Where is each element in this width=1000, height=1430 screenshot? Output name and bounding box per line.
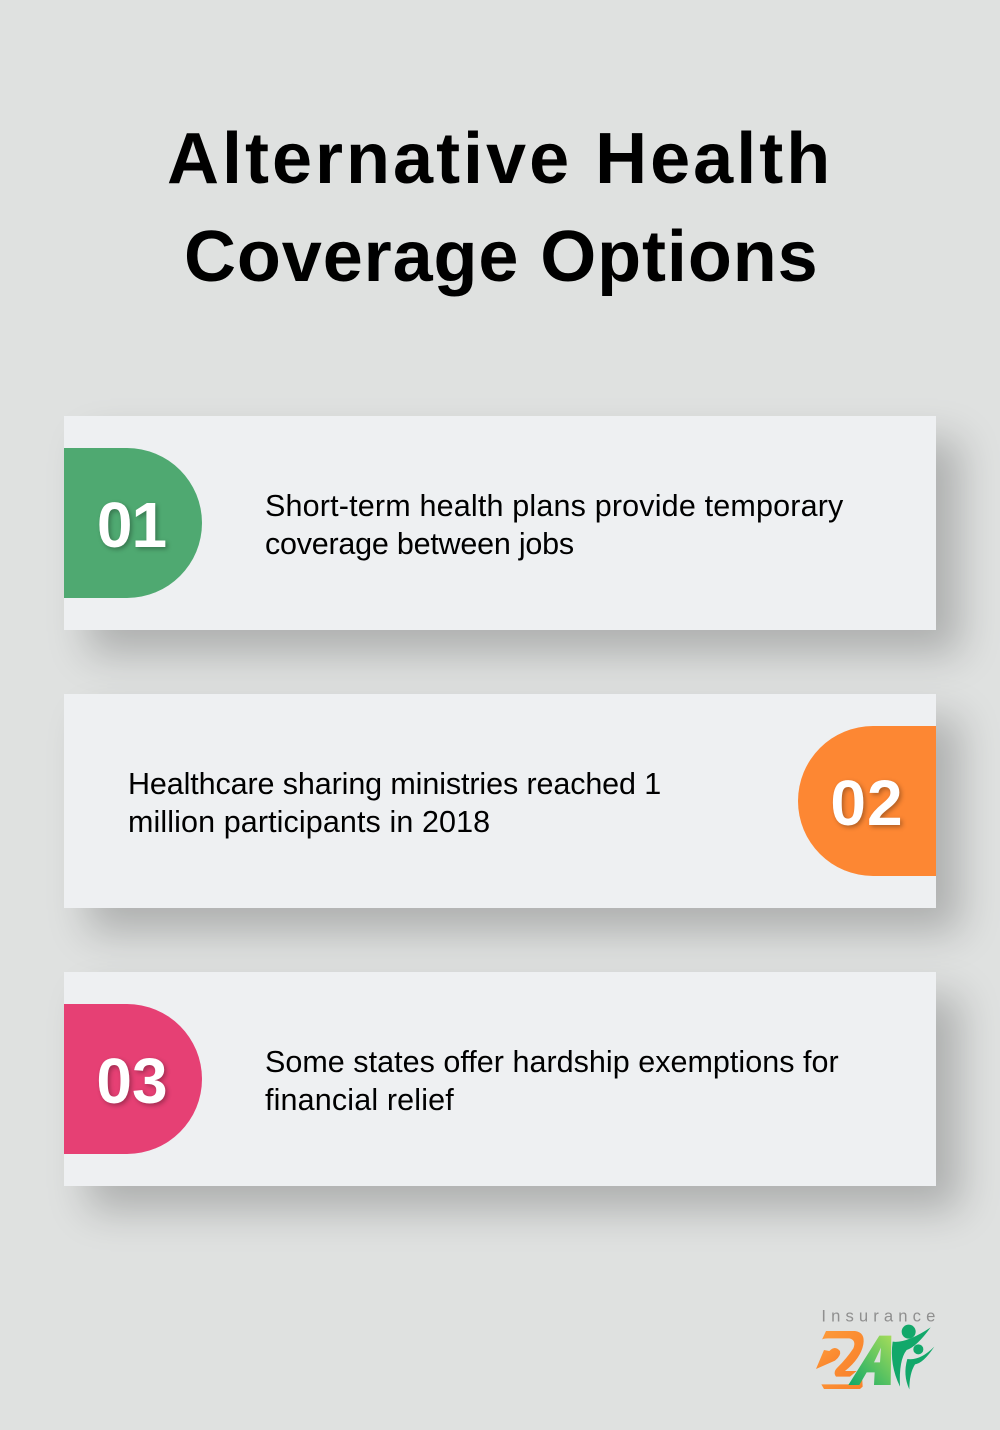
text: option 03: financial relief [265, 1083, 454, 1117]
text: option 03: Some states offer hardship exemptions for [265, 1045, 839, 1079]
text: option 01: Short-term health plans provide temporary [265, 489, 843, 523]
text: option 02: million participants in 2018 [128, 805, 490, 839]
badge: 01: 01 [97, 489, 166, 561]
badge: 02: 02 [830, 767, 904, 839]
badge: 01 [64, 448, 202, 598]
panel: option 03 [64, 972, 936, 1186]
badge: 02 [798, 726, 936, 876]
text: option 03 [265, 1045, 839, 1117]
panel: option 02 [64, 694, 936, 908]
badge: 03: 03 [96, 1045, 168, 1117]
logo: Insurance 2A: Insurance [821, 1307, 935, 1326]
text: option 01 [265, 489, 844, 561]
title: Alternative Health [167, 119, 833, 199]
panel: option 01 [64, 416, 936, 630]
badge: 03 [64, 1004, 202, 1154]
title: Coverage Options [184, 217, 819, 297]
text: option 02 [128, 767, 661, 839]
title [167, 119, 833, 297]
text: option 02: Healthcare sharing ministries reached 1 [128, 767, 661, 801]
text: option 01: coverage between jobs [265, 527, 574, 561]
logo: Insurance 2A [816, 1307, 935, 1390]
